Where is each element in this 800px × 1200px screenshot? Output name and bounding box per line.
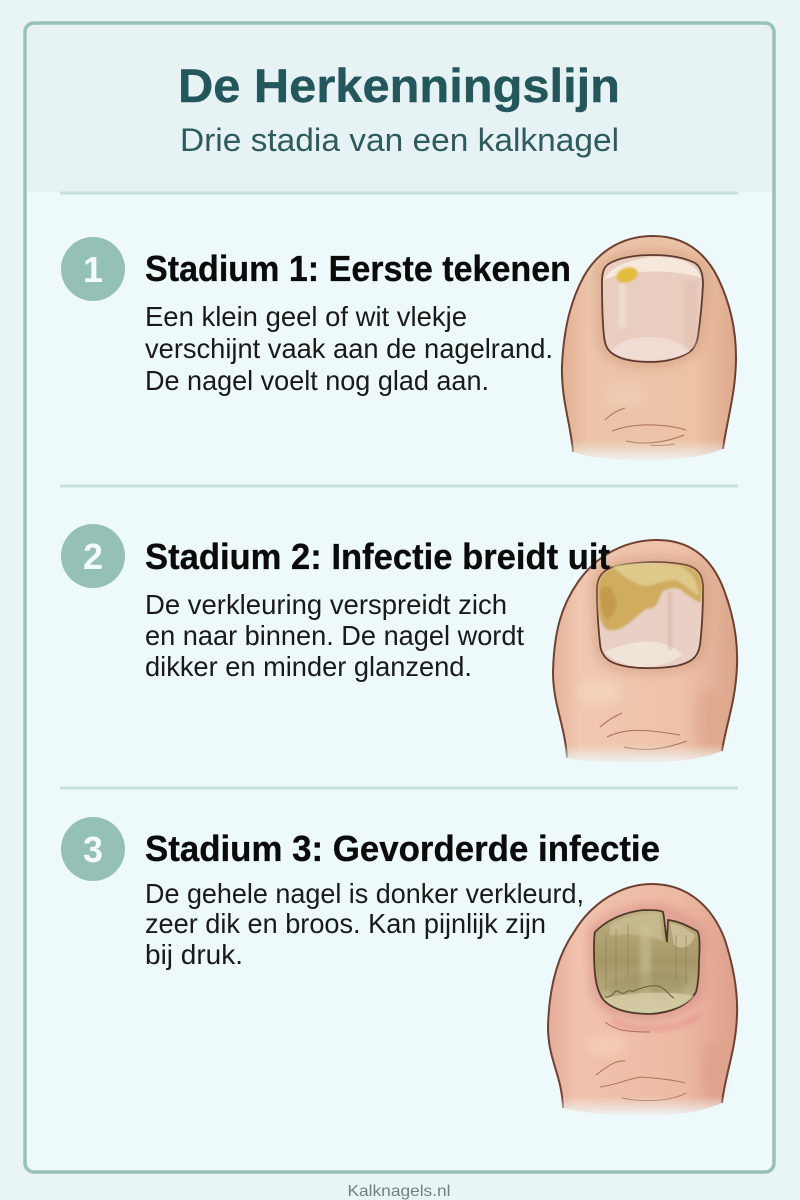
- description 2: [145, 589, 524, 682]
- description 2: en naar binnen. De nagel wordt: [145, 620, 524, 651]
- description 3: bij druk.: [145, 939, 243, 970]
- nail: [602, 255, 703, 362]
- description 1: De nagel voelt nog glad aan.: [145, 365, 489, 396]
- description 2: De verkleuring verspreidt zich: [145, 589, 507, 620]
- skin creases: [605, 408, 686, 445]
- section 1: [61, 237, 571, 396]
- section 2: [61, 524, 610, 682]
- badge 3: 3: [83, 829, 103, 870]
- description 3: zeer dik en broos. Kan pijnlijk zijn: [145, 908, 546, 939]
- heading 2: Stadium 2: Infectie breidt uit: [145, 536, 610, 577]
- icon: toe stage 2: [550, 540, 740, 766]
- description 1: verschijnt vaak aan de nagelrand.: [145, 333, 553, 364]
- heading 3: Stadium 3: Gevorderde infectie: [145, 828, 660, 869]
- badge 1: [61, 237, 125, 301]
- description 3: De gehele nagel is donker verkleurd,: [145, 878, 584, 909]
- skin creases: [596, 1022, 686, 1101]
- skin creases: [600, 713, 687, 749]
- nail: [597, 562, 703, 668]
- section 3: [61, 817, 660, 970]
- badge 1: 1: [83, 249, 103, 290]
- icon: toe stage 1: [560, 236, 740, 464]
- badge 3: [61, 817, 125, 881]
- description 1: Een klein geel of wit vlekje: [145, 301, 467, 332]
- heading 1: Stadium 1: Eerste tekenen: [145, 248, 571, 289]
- description 3: [145, 878, 584, 970]
- badge 2: [61, 524, 125, 588]
- description 2: dikker en minder glanzend.: [145, 651, 472, 682]
- icon: toe stage 3: [545, 884, 740, 1118]
- badge 2: 2: [83, 536, 103, 577]
- description 1: [145, 301, 553, 396]
- yellow spot: [614, 265, 640, 285]
- title: De Herkenningslijn: [178, 59, 620, 112]
- nail: [594, 910, 700, 1014]
- footer: Kalknagels.nl: [348, 1183, 450, 1200]
- subtitle: Drie stadia van een kalknagel: [180, 122, 619, 158]
